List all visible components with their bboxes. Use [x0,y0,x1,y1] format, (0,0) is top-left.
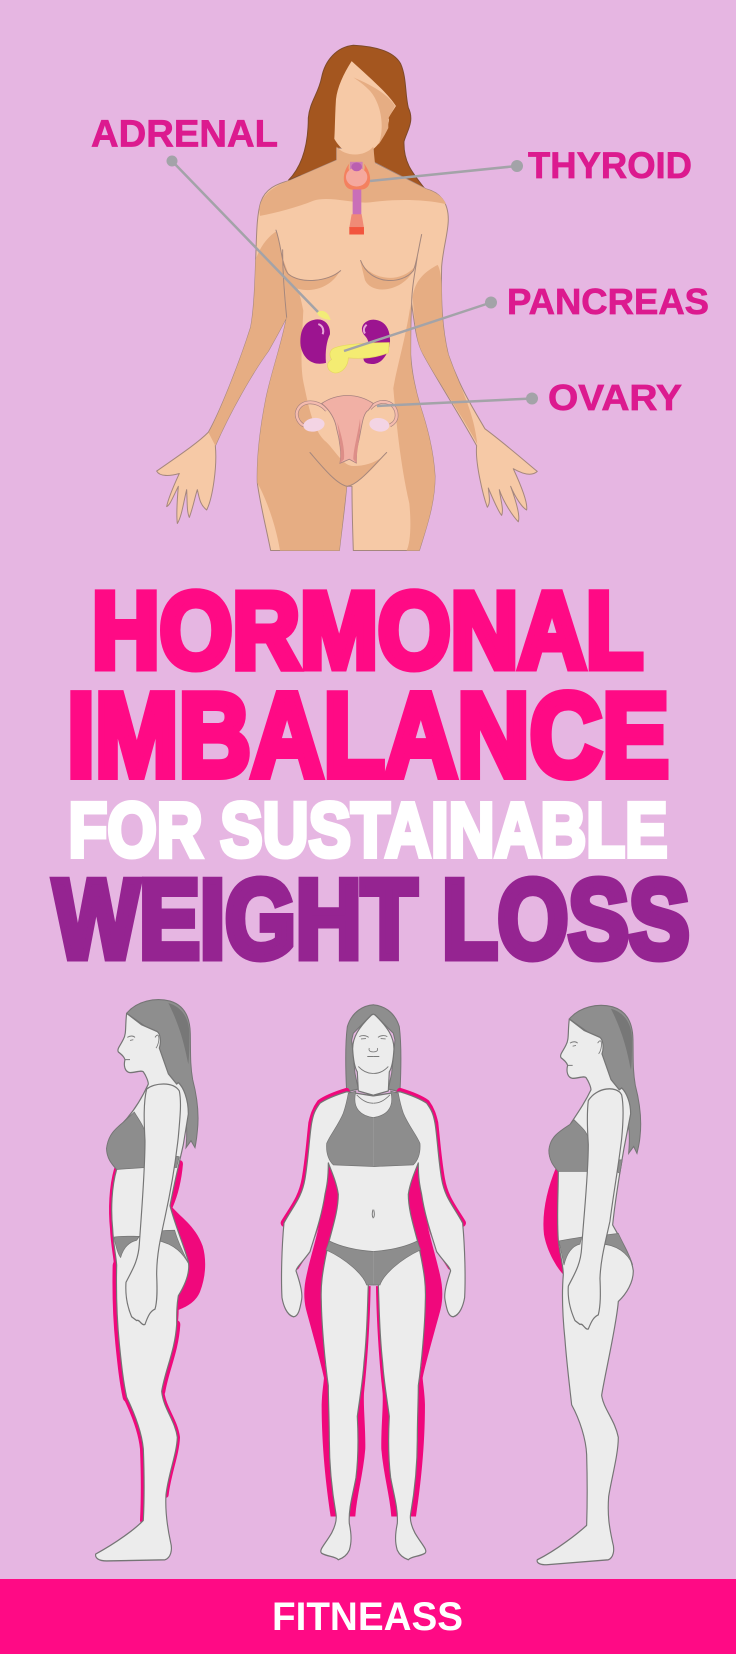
right kidney [362,320,390,364]
right figure face details [568,1041,602,1065]
middle figure arm halo [284,1092,347,1223]
middle figure inner arm halo [297,1194,325,1267]
footer bar [0,1579,736,1654]
middle figure face details [357,1036,374,1103]
middle front-view figure: fat on flanks and thighs [282,1005,465,1560]
body silhouette [157,148,537,551]
middle figure inner leg halo [349,1286,371,1517]
left arm shading [209,231,287,446]
middle figure right half mirrored [368,1005,465,1560]
left figure hair [127,1000,198,1148]
shading on face [353,77,395,145]
uterus and ovaries [297,396,397,463]
hair [288,45,425,189]
left figure bra [107,1112,179,1169]
face [334,61,396,156]
pancreas leader line [344,296,497,351]
pancreas callout [344,281,709,351]
adrenal leader line [166,156,318,312]
ovary label: OVARY [548,377,682,418]
left kidney [300,319,330,364]
title line: hormonal: HORMONAL [92,570,643,691]
right hip shading [393,304,435,551]
right figure belly fat highlight [543,1168,567,1275]
title [54,570,690,982]
middle figure flank and thigh fat [304,1160,342,1517]
middle figure body half [282,1013,378,1560]
adrenal callout [91,114,318,312]
anatomy figure [157,45,537,551]
right arm shading [413,265,477,444]
pancreas [328,343,389,373]
left figure face details [125,1035,159,1060]
middle figure hair [346,1005,378,1092]
middle figure bra half [327,1091,378,1167]
footer brand text: FITNEASS [272,1595,463,1639]
middle figure underwear half [326,1241,378,1285]
left figure halos [112,1164,205,1520]
left figure arm [126,1084,180,1325]
pancreas label: PANCREAS [507,281,709,322]
left figure dark hair band [168,1003,189,1064]
thyroid leader line [370,160,523,181]
thyroid callout [370,145,692,186]
left figure body [96,1013,189,1561]
thyroid label: THYROID [528,145,692,186]
left figure underwear [114,1230,189,1265]
middle figure navel [372,1210,373,1218]
ovary callout [377,377,682,418]
right figure hair [569,1005,641,1153]
adrenal label: ADRENAL [91,114,278,156]
right figure body [537,1019,633,1565]
neck and shoulder shading [259,147,446,216]
left hip shading [257,260,387,551]
trachea and thyroid [344,162,370,234]
left side-view figure: fat on hips and buttocks [96,1000,205,1561]
body contour lines [276,230,422,486]
middle figure left half [282,1005,378,1560]
right side-view figure: fat on belly [537,1005,641,1565]
right figure underwear [559,1233,633,1265]
ovary leader line [377,392,538,406]
breast shading [288,260,415,290]
right figure dark hair band [611,1009,632,1070]
right figure bra [549,1120,622,1173]
right figure arm [568,1089,623,1329]
adrenal glands [317,311,331,320]
